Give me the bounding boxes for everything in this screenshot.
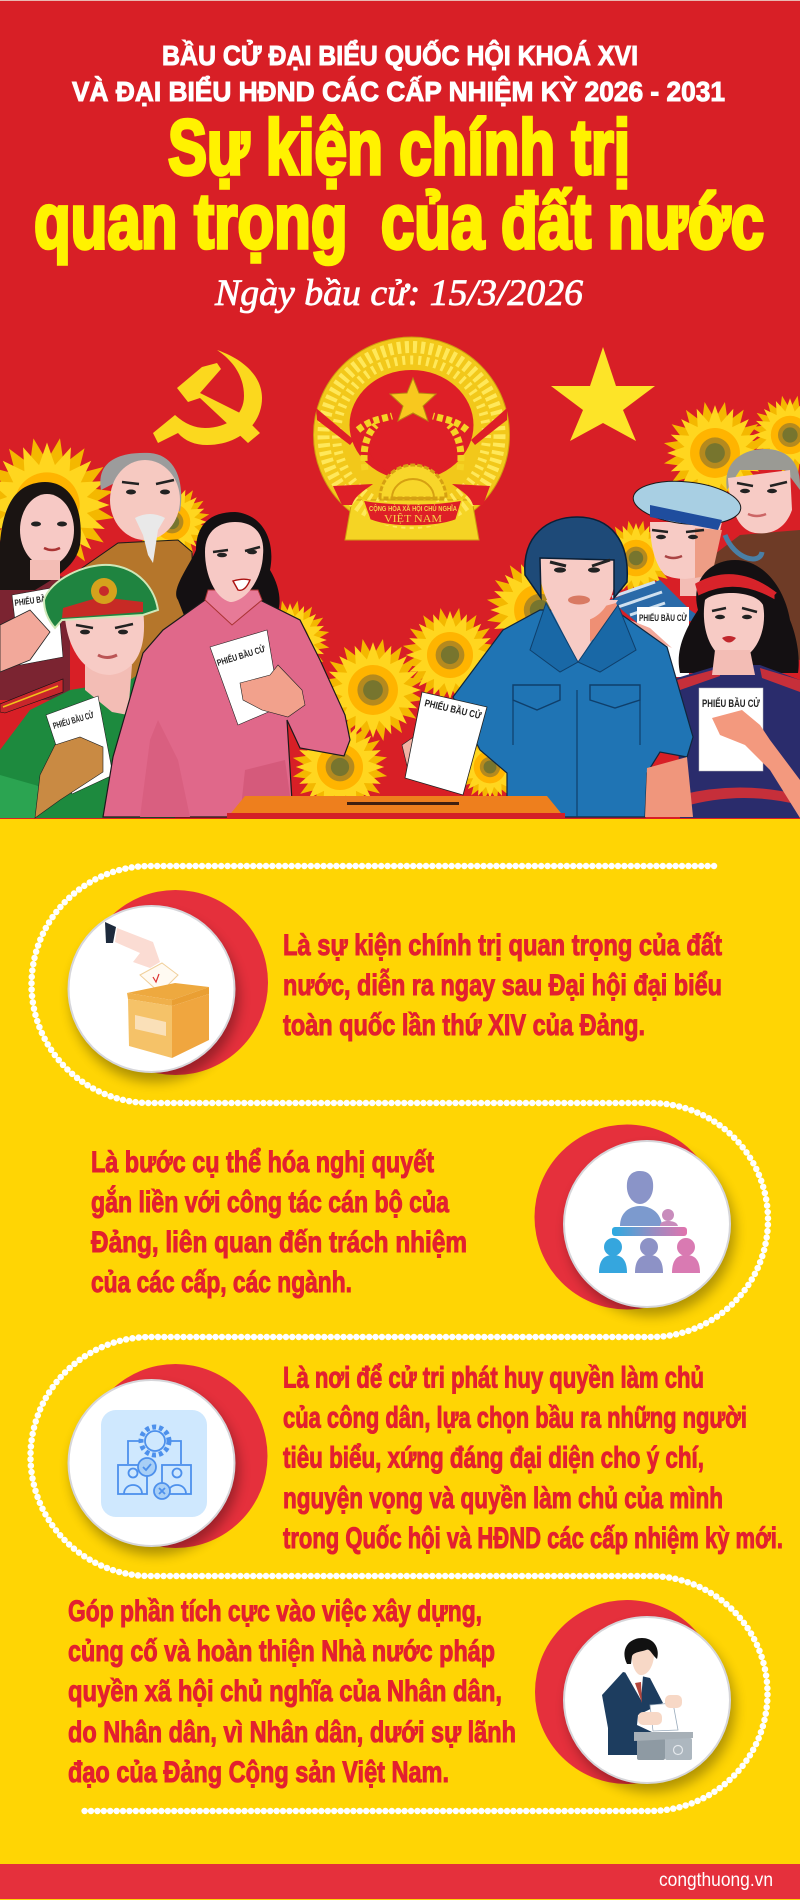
emblem side bands [316, 408, 507, 505]
title [34, 103, 764, 265]
text: item 4: củng cố và hoàn thiện Nhà nước pháp [68, 1635, 495, 1668]
footer bar [0, 1864, 800, 1899]
figure: worker in blue [402, 517, 693, 817]
ballot [12, 587, 63, 665]
emblem red field [350, 370, 474, 480]
text: item 3 [283, 1362, 783, 1555]
election date: Ngày bầu cử: 15/3/2026 [214, 273, 584, 314]
ballot [210, 630, 280, 725]
icon circle: voter selection [68, 1364, 268, 1555]
figure: woman with red headband [677, 560, 800, 818]
open collar skin [546, 600, 618, 662]
icon: man and box [602, 1638, 693, 1760]
cap badge [91, 578, 117, 604]
icon: gear and candidates [101, 1410, 207, 1517]
emblem star [390, 378, 436, 421]
figure: old man [72, 453, 194, 700]
header panel red [0, 0, 800, 819]
figure: man top right [707, 449, 800, 660]
illustration: sunflowers [0, 388, 800, 823]
ballot box [227, 796, 565, 819]
panel: item 2 [91, 1124, 735, 1316]
text: item 4: quyền xã hội chủ nghĩa của Nhân dân, [68, 1675, 502, 1708]
epaulette [0, 679, 63, 713]
ballot: PHIẾU BẦU CỬ [423, 696, 483, 722]
icon circle: ballot box [68, 890, 268, 1082]
ballot: PHIẾU BẦU CỬ [639, 612, 687, 623]
text: item 4: Góp phần tích cực vào việc xây dựng, [68, 1595, 482, 1628]
icon: speaker and audience [599, 1171, 700, 1273]
text: item 2: Đảng, liên quan đến trách nhiệm [91, 1226, 467, 1259]
panel: item 3 [68, 1362, 783, 1555]
bare forearm [645, 757, 693, 817]
emblem ribbon [363, 500, 462, 526]
icon: yellow star [551, 347, 655, 441]
ballot [405, 692, 487, 795]
ballot [637, 607, 689, 677]
ballot: PHIẾU BẦU [14, 593, 51, 608]
icon circle: man casting vote [535, 1600, 735, 1792]
ballot: PHIẾU BẦU CỬ [215, 643, 267, 668]
text: item 4 [68, 1595, 516, 1789]
heading: election subtitle [72, 39, 725, 107]
heading: election subtitle: VÀ ĐẠI BIỂU HĐND CÁC CẤP NHIỆM KỲ 2026 - 2031 [72, 76, 725, 107]
icon: national emblem [314, 337, 510, 540]
heading: election subtitle: BẦU CỬ ĐẠI BIỂU QUỐC HỘI KHOÁ XVI [162, 39, 638, 71]
ballot [46, 696, 113, 794]
figure: sailor [610, 476, 762, 677]
source credit: congthuong.vn [659, 1870, 773, 1891]
text: item 2: Là bước cụ thể hóa nghị quyết [91, 1146, 434, 1179]
panel: item 1 [68, 890, 722, 1082]
hand [402, 736, 425, 775]
emblem gear [380, 465, 446, 498]
emblem ribbon: VIỆT NAM [384, 513, 442, 525]
icon: box [127, 983, 209, 1058]
figure: woman in pink ao dai [103, 512, 350, 817]
text: item 2: của các cấp, các ngành. [91, 1266, 352, 1299]
figure: woman left [0, 482, 81, 700]
icon: hammer and sickle [153, 350, 262, 445]
text: item 4: do Nhân dân, vì Nhân dân, dưới sự lãnh [68, 1716, 516, 1749]
text: item 1 [283, 929, 722, 1042]
ballot: PHIẾU BẦU CỬ [52, 709, 95, 731]
ballot [699, 688, 763, 771]
text: item 4: đạo của Đảng Cộng sản Việt Nam. [68, 1756, 449, 1789]
dotted path connector [30, 866, 768, 1811]
text: item 2: gắn liền với công tác cán bộ của [91, 1185, 449, 1219]
ballot: PHIẾU BẦU CỬ [702, 697, 761, 710]
emblem ribbon: CỘNG HÒA XÃ HỘI CHỦ NGHĨA [369, 504, 457, 513]
text: item 1: toàn quốc lần thứ XIV của Đảng. [283, 1009, 645, 1042]
icon circle: meeting [534, 1124, 735, 1316]
emblem wheat sprigs [358, 416, 467, 470]
panel: item 4 [68, 1595, 735, 1792]
title: Sự kiện chính trị [168, 103, 630, 191]
text: item 2 [91, 1146, 467, 1299]
icon: hand with ballot [105, 922, 178, 993]
figure: police officer [0, 565, 175, 818]
